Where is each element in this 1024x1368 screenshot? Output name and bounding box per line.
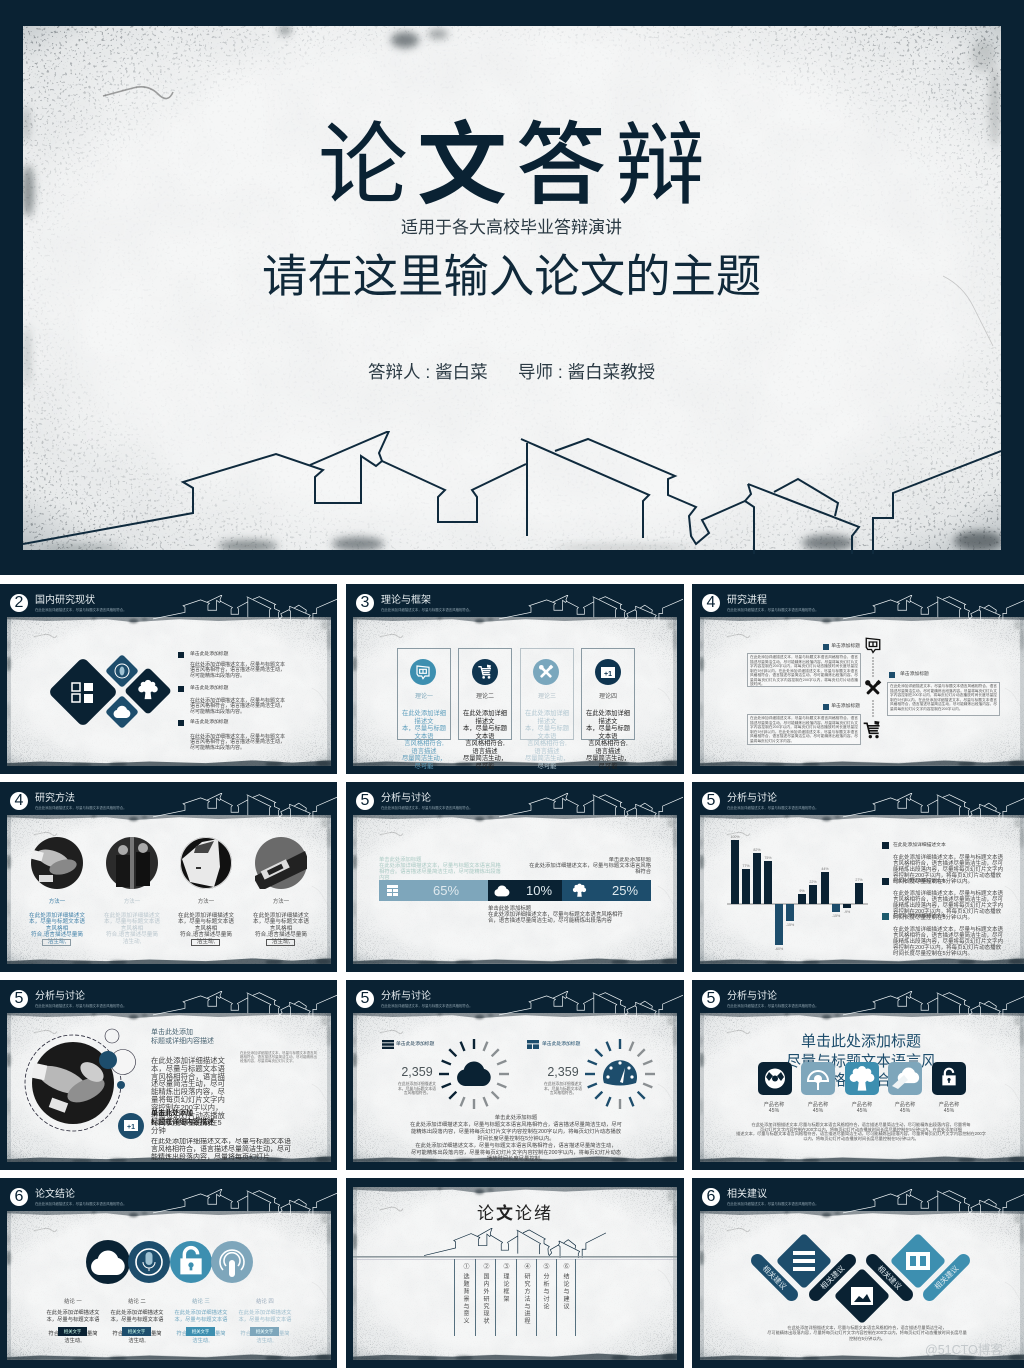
card 2: 文本语 (476, 732, 494, 740)
list item 2: 单击此处添加标题 (190, 686, 228, 691)
skyline illustration (23, 431, 1001, 554)
conclusion 1: 本，尽量与标题文本语 (46, 1317, 99, 1323)
slide header: 在此处添加详细描述文本，尽量与标题文本语言风格相符合。 (727, 608, 819, 612)
text top left: 在此处添加详细描述文本，尽量与标题文本语言风格相符合。语言描述尽量简洁生动，尽可能精炼出段落内容 (379, 863, 501, 881)
slide header (692, 980, 1024, 1014)
panel: research progress (692, 584, 1024, 774)
list item 1: 在此处添加详细描述文本，尽量与标题文本语言风格相符合，语言描述尽量简洁生动，尽可能精炼出段落内容。 (190, 662, 285, 679)
stacked percentage bar: 65% (433, 883, 459, 898)
card 1: 尽可能 (415, 762, 433, 770)
slide header: 5 (15, 990, 23, 1007)
tile captions: 45% (900, 1108, 910, 1114)
list item 2 (882, 878, 1003, 921)
conclusion 1: 结论 一 (64, 1299, 82, 1305)
slide header: 在此处添加详细描述文本，尽量与标题文本语言风格相符合。 (35, 608, 127, 612)
presenter line (368, 362, 655, 382)
method 1: 在此处添加详细描述文 (29, 913, 85, 919)
overlapping heading (151, 1109, 214, 1126)
slide header: 2 (15, 594, 23, 611)
large heading (761, 1032, 961, 1092)
card 3: 言风格相符合, (527, 740, 567, 747)
card 3: 尽量简洁生动， (525, 755, 569, 762)
text top right (529, 857, 651, 875)
step 2: 单击添加标题 (900, 672, 929, 677)
outline columns: ② 国内外研究现状 (482, 1263, 488, 1325)
card 3: 在此处添加详细 (525, 710, 569, 717)
outline columns (454, 1258, 576, 1338)
bottom description: 在此处添加详细描述文本，尽量与标题文本语言风格相符合，语言描述尽量简洁生动，尽可 (410, 1122, 622, 1128)
small skyline (424, 1228, 606, 1258)
conclusion 3: 在此处添加详细描述文 (174, 1310, 227, 1316)
list item 3 (882, 913, 1003, 957)
thesis topic: 请在这里输入论文的主题 (262, 251, 761, 302)
slide header (356, 990, 683, 1017)
card 4: 描述文 (599, 718, 617, 724)
conclusion 1 (43, 1296, 103, 1348)
stacked percentage bar: 10% (526, 883, 552, 898)
conclusion 1: 符合,语言描述尽量简 (48, 1331, 98, 1337)
bottom description (721, 1123, 1001, 1143)
panel: title slide (0, 0, 1024, 575)
method 4: 言风格相 (270, 926, 292, 932)
method 4: 在此处添加详细描述文 (253, 913, 309, 919)
tile captions: 45% (813, 1108, 823, 1114)
overlapping heading: 单击此处添加 (151, 1110, 193, 1117)
tile captions: 产品名称 (808, 1102, 828, 1108)
card 2 (458, 648, 512, 770)
method 4 (253, 837, 309, 946)
list item 3: 在此处添加详细描述文本，尽量与标题文本语言风格相符合，语言描述尽量简洁生动，尽可能精炼出段落内容。 (190, 734, 285, 751)
photo circle with decorations: +1 (127, 1124, 135, 1131)
list item 3 (178, 718, 285, 751)
slide header: 在此处添加详细描述文本，尽量与标题文本语言风格相符合。 (727, 1004, 819, 1008)
card 2: 在此处添加详细 (463, 710, 507, 717)
timeline icons (864, 638, 882, 738)
presenter line: 答辩人 : 酱白菜 (368, 362, 488, 382)
slide header: 5 (361, 792, 369, 809)
bar chart: 100% (730, 835, 740, 839)
bar chart: 22% (809, 880, 817, 884)
bottom description: 尽可能精炼出段落内容，尽量将每页幻灯片文字内容控制在200字以内，将每页幻灯片动态 (411, 1150, 621, 1156)
pill 4 (920, 1251, 972, 1304)
card 2: 尽可能 (476, 762, 494, 770)
slide header (702, 594, 1024, 621)
method 3: 言风格相 (195, 926, 217, 932)
bar chart: 75% (764, 856, 772, 860)
bar chart: 44% (821, 867, 829, 871)
method 4: 本，尽量与标题文本语 (253, 919, 309, 925)
metric 2: 言风格相符合。 (550, 1091, 576, 1095)
step 2 (887, 670, 1000, 716)
tile captions: 45% (769, 1108, 779, 1114)
slide header: 在此处添加详细描述文本，尽量与标题文本语言风格相符合。 (727, 1202, 819, 1206)
card 4: 尽量简洁生动， (586, 755, 630, 762)
watermark: @51CTO博客 (925, 1343, 1003, 1357)
bottom description: 以内，将每页幻灯片动态播放时间长度尽量控制在5分钟以内。 (803, 1136, 919, 1141)
panel: analysis with product tiles (692, 980, 1024, 1170)
bar chart: -15% (786, 923, 795, 927)
conclusion 4 (235, 1296, 295, 1348)
bottom description: 描述文本，尽量与标题文本语言风格相符合，语言描述尽量简洁生动，尽可能精炼出段落内容，尽量将每页幻灯片文字内容控制在200字 (736, 1131, 986, 1136)
metric 2: 单击此处添加标题 (542, 1042, 580, 1047)
text top left: 单击此处添加标题 (379, 857, 421, 863)
card 1: 语言描述 (411, 748, 437, 754)
bottom description: 时间长度尽量控制在5分钟以内。 (477, 1136, 555, 1142)
text below bar: 在此处添加详细描述文本，尽量与标题文本语言风格相符合，语言描述尽量简洁生动，尽可能精炼出段落内容 (488, 912, 623, 924)
card 3: 语言描述 (534, 748, 560, 754)
slide header: 理论与框架 (381, 595, 431, 606)
step 3 (747, 702, 861, 745)
bar chart: 77% (742, 864, 750, 868)
card 2: 理论二 (476, 694, 494, 700)
method 4: 方法一 (273, 899, 289, 905)
text top right: 单击此处添加标题 (609, 857, 651, 863)
conclusion 2 (107, 1296, 167, 1348)
tile captions: 产品名称 (895, 1102, 915, 1108)
list item 1 (882, 842, 1003, 885)
conclusion 3: 符合,语言描述尽量简 (176, 1331, 226, 1337)
slide header: 5 (707, 792, 715, 809)
panel: thesis conclusion (0, 1178, 337, 1368)
conclusion 1: 在此处添加详细描述文 (46, 1310, 99, 1316)
slide header: 6 (15, 1188, 23, 1205)
card 3: 理论三 (538, 694, 556, 700)
list item 2: 在此处添加详细描述文本，尽量与标题文本语言风格相符合，语言描述尽量简洁生动，尽可能精炼出段落内容，尽量将每页幻灯片文字内容控制在200字以内，将每页幻灯片动态播放时间长度尽量控制在5分钟以内。 (893, 891, 1003, 921)
card 3 (520, 648, 574, 770)
bottom description: 在此处添加详细描述文本,尽量与标题文本语言风格相符合，语言描述尽量简洁生动，尽可能精炼出段落内容，尽量将每 (752, 1122, 970, 1127)
card 1: 在此处添加详细 (402, 710, 446, 717)
card 4 (581, 648, 635, 770)
panel: analysis with photo circle (0, 980, 337, 1170)
list item 1: 在此处添加详细描述文本，尽量与标题文本语言风格相符合，语言描述尽量简洁生动，尽可能精炼出段落内容，尽量将每页幻灯片文字内容控制在200字以内，将每页幻灯片动态播放时间长度尽量控制在5分钟以内。 (893, 855, 1003, 885)
pill 1 (748, 1251, 801, 1304)
conclusion 2: 本，尽量与标题文本语 (110, 1317, 163, 1323)
panel: related recommendations (692, 1178, 1024, 1368)
slide header: 在此处添加详细描述文本，尽量与标题文本语言风格相符合。 (35, 1202, 127, 1206)
panel: domestic research status (0, 584, 337, 774)
bottom description (727, 1325, 1007, 1343)
metric 1 (382, 1039, 509, 1109)
conclusion 4: 符合,语言描述尽量简 (240, 1331, 290, 1337)
bar chart: -9% (844, 910, 851, 914)
card 1 (397, 648, 451, 770)
list item 2: 在此处添加详细描述文本，尽量与标题文本语言风格相符合，语言描述尽量简洁生动，尽可能精炼出段落内容。 (190, 698, 285, 715)
conclusion 3: 洁生动, (192, 1338, 210, 1344)
step 2: 在此处添加详细描述文本，尽量与标题文本语言风格相符合，语言描述尽量简洁生动，尽可能精炼出段落内容。尽量将每页幻灯片文字内容控制在200字以内，将每页幻灯片动态播放时间长度尽量控制在5分钟以内。在此处添加详细描述文本，尽量与标题文本语言风格相符合，语言描述尽量简洁生动，尽可能精炼出段落内容。尽量将每页幻灯片文字内容控制在200字以内。 (890, 684, 997, 710)
slide header: 3 (361, 594, 369, 611)
slide header: 在此处添加详细描述文本，尽量与标题文本语言风格相符合。 (35, 1004, 127, 1008)
conclusion 4: 在此处添加详细描述文 (238, 1310, 291, 1316)
text heading: 单击此处添加 (151, 1029, 193, 1036)
slide header (356, 594, 683, 621)
metric 1: 言风格相符合。 (404, 1091, 430, 1095)
tile 5 (932, 1062, 966, 1095)
slide header: 论文结论 (35, 1189, 75, 1200)
outline columns: ⑤ 分析与讨论 (542, 1263, 548, 1310)
metric 1: 本，尽量与标题文本语 (398, 1087, 436, 1091)
pill 2 (806, 1251, 858, 1304)
pill 2: 相关建议 (818, 1264, 846, 1291)
bottom description: 尽可能精炼出段落内容，尽量将每页幻灯片文字内容控制在200字以内，将每页幻灯片动态播放时间长度尽量 (767, 1330, 967, 1335)
method 1: 符合,语言描述尽量简 (31, 932, 83, 938)
list item 3: 在此处添加详细描述文本，尽量与标题文本语言风格相符合，语言描述尽量简洁生动，尽可能精炼出段落内容，尽量将每页幻灯片文字内容控制在200字以内，将每页幻灯片动态播放时间长度尽量控制在5分钟以内。 (893, 927, 1003, 957)
list item 3: 在此处添加详细描述文本 (893, 914, 946, 919)
list item 1 (178, 650, 285, 679)
method 3: 在此处添加详细描述文 (178, 913, 234, 919)
slide header: 5 (707, 990, 715, 1007)
card 3: 尽可能 (538, 762, 556, 770)
metric 2 (527, 1036, 659, 1112)
card 3: 描述文 (538, 718, 556, 724)
bottom description: 页幻灯片文字内容控制在200字以内，将每页幻灯片动态播放时间长度尽量控制在5分钟以内。在此处添加详细 (760, 1127, 962, 1132)
large heading: 尽量与标题文本语言风 (786, 1052, 936, 1070)
overlapping heading: 标题或详细内容描述 (151, 1118, 214, 1126)
slide header: 分析与讨论 (381, 793, 431, 804)
panel: analysis with sunburst metrics (346, 980, 684, 1170)
slide header: 研究方法 (35, 793, 75, 804)
conclusion 2: 洁生动, (128, 1338, 146, 1344)
large heading: 格相符合 (831, 1072, 891, 1089)
tile captions: 45% (857, 1108, 867, 1114)
outline columns: ⑥ 结论与建议 (562, 1263, 568, 1310)
main title: 论文答辩 (318, 116, 714, 216)
method 1 (29, 837, 85, 946)
bottom description: 在此处添加详细描述文本，尽量与标题文本语言风格相符合，语言描述尽量简洁生动， (415, 1143, 617, 1149)
metric 2: 在此处添加详细描述文 (544, 1082, 582, 1086)
divider (353, 1256, 677, 1260)
presenter line: 导师 : 酱白菜教授 (518, 362, 655, 382)
small note: 在此处添加详细描述文本，尽量与标题文本语言风格相符合，语言描述尽量简洁生动，尽可能精炼出段落内容，尽量将每页幻灯片文字。 (240, 1051, 317, 1063)
method 4: 洁生动, (272, 939, 290, 945)
metric 2: 2,359 (547, 1065, 579, 1079)
pill 3: 相关建议 (875, 1264, 903, 1291)
card 4: 文本语 (599, 732, 617, 740)
card 2: 尽量简洁生动， (463, 755, 507, 762)
bottom description: 控制在5分钟以内。 (849, 1336, 885, 1341)
slide header (0, 1178, 337, 1212)
bar chart (727, 835, 868, 951)
card 1: 描述文 (415, 718, 433, 724)
metric 2: 本，尽量与标题文本语 (544, 1087, 582, 1091)
card 4: 言风格相符合, (588, 740, 628, 747)
conclusion 4: 本，尽量与标题文本语 (238, 1317, 291, 1323)
card 3: 文本语 (538, 732, 556, 740)
text heading (151, 1028, 214, 1044)
conclusion 3: 相关文字 (192, 1329, 209, 1334)
method 4: 符合,语言描述尽量简 (255, 932, 307, 938)
bottom description: 在此处添加详细描述文本，尽量与标题文本语言风格相符合，语言描述尽量简洁生动， (787, 1325, 947, 1330)
panel: theory and framework (346, 584, 684, 774)
panel: analysis bar chart (692, 782, 1024, 972)
bar chart: 9% (799, 889, 805, 893)
conclusion 2: 在此处添加详细描述文 (110, 1310, 163, 1316)
pill 1: 相关建议 (761, 1264, 788, 1291)
metric 1: 2,359 (401, 1065, 433, 1079)
panel: analysis with percentage bar (346, 782, 684, 972)
outline columns: ③ 理论框架 (502, 1263, 508, 1303)
bar chart: 82% (753, 848, 761, 852)
slide header: 在此处添加详细描述文本，尽量与标题文本语言风格相符合。 (727, 806, 819, 810)
slide header: 4 (707, 594, 715, 611)
bottom description: 单击此处添加标题 (495, 1115, 537, 1121)
slide header (10, 594, 337, 621)
tile 4 (888, 1062, 922, 1095)
card 2: 本，尽量与标题 (463, 725, 507, 732)
conclusion 2: 符合,语言描述尽量简 (112, 1331, 162, 1337)
slide header (692, 1178, 1024, 1212)
text below bar: 单击此处添加标题 (488, 906, 531, 912)
method 2: 言风格相 (121, 926, 143, 932)
slide header: 分析与讨论 (727, 793, 777, 804)
paper background (23, 26, 1001, 550)
method 1: 本，尽量与标题文本语 (29, 919, 85, 925)
slide header (702, 792, 1024, 819)
card 4: 语言描述 (595, 748, 621, 754)
method 2 (104, 837, 160, 945)
slide header: 研究进程 (727, 595, 767, 606)
pill 3 (863, 1251, 915, 1304)
panel: research methods (0, 782, 337, 972)
tile captions: 产品名称 (764, 1102, 784, 1108)
bar chart: -60% (775, 947, 784, 951)
conclusion 3: 本，尽量与标题文本语 (174, 1317, 227, 1323)
card 4: 在此处添加详细 (586, 710, 630, 717)
step 1: 单击添加标题 (831, 644, 860, 649)
outline columns: ① 选题背景与意义 (462, 1263, 468, 1325)
slide header: 在此处添加详细描述文本，尽量与标题文本语言风格相符合。 (381, 1004, 473, 1008)
bottom description (396, 1115, 636, 1167)
slide header (10, 792, 337, 819)
tile captions: 产品名称 (852, 1102, 872, 1108)
slide header: 5 (361, 990, 369, 1007)
card 4: 尽可能 (599, 762, 617, 770)
card 4: 理论四 (599, 694, 617, 700)
list item 2 (178, 684, 285, 715)
conclusion 4: 洁生动, (256, 1338, 274, 1344)
card 1: 本，尽量与标题 (402, 725, 446, 732)
list item 3: 单击此处添加标题 (190, 720, 228, 725)
card 1: 言风格相符合, (404, 740, 444, 747)
bottom description: 能精炼出段落内容，尽量将每页幻灯片文字内容控制在200字以内，将每页幻灯片动态播放 (411, 1129, 621, 1135)
large heading: 单击此处添加标题 (801, 1033, 921, 1050)
card 1: 文本语 (415, 732, 433, 740)
slide header: 国内研究现状 (35, 595, 95, 606)
method 2: 在此处添加详细描述文 (104, 913, 160, 919)
step 1 (747, 642, 861, 687)
metric 1: 单击此处添加标题 (396, 1042, 434, 1047)
bar chart: -15% (832, 914, 841, 918)
method 3: 方法一 (198, 899, 214, 905)
conclusion 3: 结论 三 (192, 1299, 210, 1305)
slide header: 在此处添加详细描述文本，尽量与标题文本语言风格相符合。 (381, 608, 473, 612)
card 2: 语言描述 (472, 748, 498, 754)
card 2: 描述文 (476, 718, 494, 724)
card 2: 言风格相符合, (465, 740, 505, 747)
slide header (10, 990, 337, 1017)
text top right: 在此处添加详细描述文本，尽量与标题文本语言风格相符合 (529, 863, 651, 875)
tile 2 (801, 1062, 835, 1095)
slide header: 相关建议 (727, 1189, 767, 1200)
conclusion 3 (171, 1296, 231, 1348)
four linked circle icons (84, 1238, 254, 1286)
method 1: 方法一 (49, 899, 65, 905)
slide header: 分析与讨论 (727, 991, 777, 1002)
panel: thesis outline (346, 1178, 684, 1368)
step 3: 在此处添加详细描述文本，尽量与标题文本语言风格相符合，语言描述尽量简洁生动，尽可能精炼出段落内容。尽量将每页幻灯片文字内容控制在200字以内，将每页幻灯片动态播放时间长度尽量控制在5分钟以内。在此处添加详细描述文本，尽量与标题文本语言风格相符合，语言描述尽量简洁生动，尽可能精炼出段落内容。尽量将每页幻灯片文字内容。 (750, 716, 858, 742)
method 2: 符合,语言描述尽量简 (106, 932, 158, 938)
text body: 在此处添加详细描述文本，尽量与标题文本语言风格相符合，语言描述尽量简洁生动，尽可能精炼出段落内容，尽量将每页幻灯片文字内容控制在200字以内，将每页幻灯片动态播放时间长度尽量控制在5分钟 (151, 1056, 225, 1135)
method 2: 方法一 (124, 899, 140, 905)
list item 1: 在此处添加详细描述文本 (893, 843, 946, 848)
method 2: 本，尽量与标题文本语 (104, 919, 160, 925)
conclusion 2: 相关文字 (128, 1329, 145, 1334)
subtitle: 适用于各大高校毕业答辩演讲 (401, 218, 622, 237)
card 1: 理论一 (415, 694, 433, 700)
bar chart: 27% (855, 878, 863, 882)
step 3: 单击添加标题 (831, 704, 860, 709)
slide header: 4 (15, 792, 23, 809)
slide header (356, 792, 683, 819)
method 3: 符合,语言描述尽量简 (180, 932, 232, 938)
method 3: 本，尽量与标题文本语 (178, 919, 234, 925)
tile captions: 45% (944, 1108, 954, 1114)
stacked percentage bar (379, 880, 651, 901)
tile 1 (758, 1062, 792, 1095)
card 4: 本，尽量与标题 (586, 725, 630, 732)
pill 4: 相关建议 (932, 1264, 960, 1291)
text heading: 标题或详细内容描述 (151, 1038, 214, 1044)
photo circle with decorations (24, 1028, 144, 1139)
diamond icon cluster (50, 655, 170, 728)
tile captions (752, 1102, 972, 1116)
list item 2: 在此处添加详细描述文本 (893, 879, 946, 884)
slide header: 分析与讨论 (381, 991, 431, 1002)
conclusion 1: 相关文字 (64, 1329, 81, 1334)
slide header: 分析与讨论 (35, 991, 85, 1002)
lower paragraph: 在此处添加详细描述文本，尽量与标题文本语言风格相符合，语言描述尽量简洁生动，尽可能精炼出段落内容，尽量将每页幻灯片 (151, 1138, 291, 1161)
method 3: 洁生动, (197, 939, 215, 945)
card 3: 本，尽量与标题 (525, 725, 569, 732)
step 1: 在此处添加详细描述文本，尽量与标题文本语言风格相符合，语言描述尽量简洁生动，尽可能精炼出段落内容。尽量将每页幻灯片文字内容控制在200字以内，将每页幻灯片动态播放时间长度尽量控制在5分钟以内。在此处添加详细描述文本，尽量与标题文本语言风格相符合，语言描述尽量简洁生动，尽可能精炼出段落内容。尽量将每页幻灯片文字内容控制在200字以内，将每页幻灯片动态播放时间。 (750, 655, 858, 686)
card 4: +1 (604, 671, 612, 678)
method 1: 洁生动, (48, 939, 66, 945)
tile captions: 产品名称 (939, 1102, 959, 1108)
conclusion 4: 结论 四 (256, 1299, 274, 1305)
conclusion 2: 结论 二 (128, 1299, 146, 1305)
conclusion 1: 洁生动, (64, 1338, 82, 1344)
outline columns: ④ 研究方法与进程 (523, 1263, 529, 1325)
conclusion 4: 相关文字 (256, 1329, 273, 1334)
slide header: 在此处添加详细描述文本，尽量与标题文本语言风格相符合。 (381, 806, 473, 810)
outline title: 论文论绪 (477, 1204, 553, 1223)
list item 1: 单击此处添加标题 (190, 652, 228, 657)
diamond icons (772, 1228, 952, 1328)
card 1: 尽量简洁生动， (402, 755, 446, 762)
metric 1: 在此处添加详细描述文 (398, 1082, 436, 1086)
bottom description: 播放时间长度尽量控制。 (487, 1156, 545, 1162)
stacked percentage bar: 25% (612, 883, 638, 898)
method 3 (178, 837, 234, 946)
tile 3 (845, 1062, 879, 1095)
slide header: 在此处添加详细描述文本，尽量与标题文本语言风格相符合。 (35, 806, 127, 810)
method 1: 言风格相 (46, 926, 68, 932)
method 2: 洁生动, (123, 939, 141, 945)
slide header: 6 (707, 1188, 715, 1205)
text below bar (488, 904, 623, 924)
